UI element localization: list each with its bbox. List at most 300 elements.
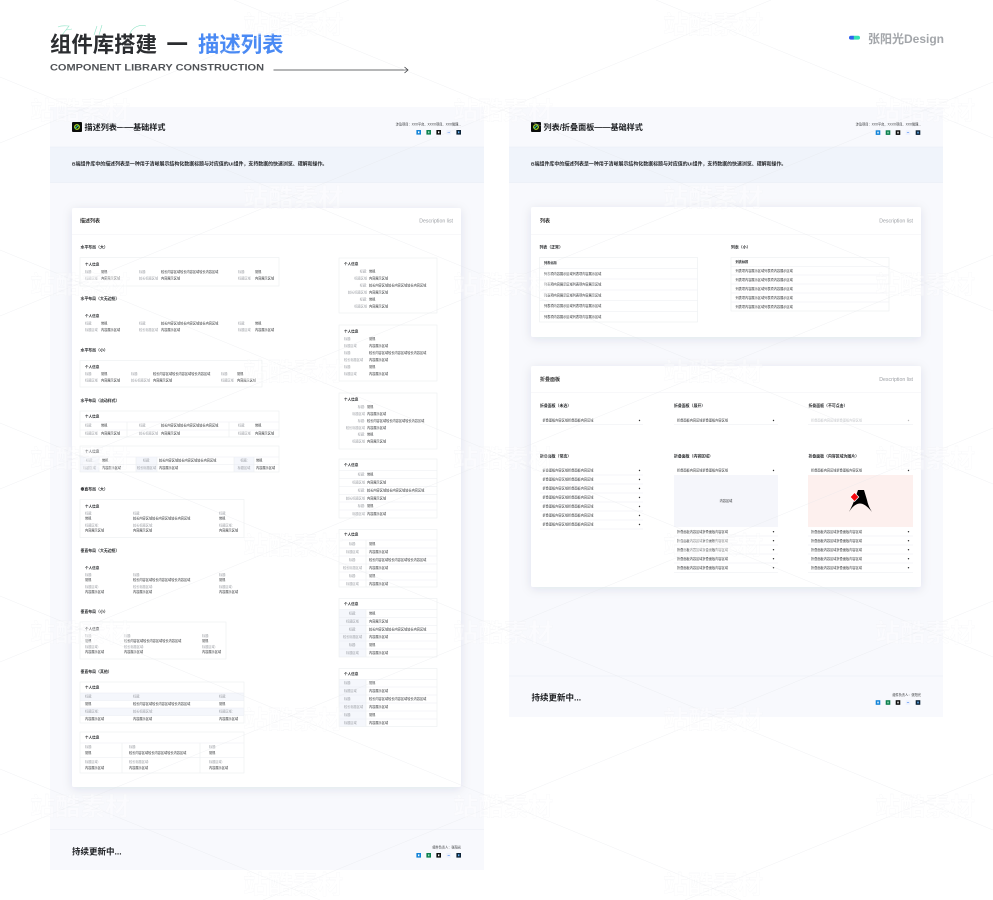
vertical other: banded: 常规 [85,701,92,706]
horizontal flow style: 标题: [85,423,92,428]
horizontal large borderless: 内容展示区域 [161,327,181,332]
watermark text: 站酷素材 [30,793,130,821]
vertical other: banded: 垂直布局（其他） [80,669,112,674]
horizontal filled table: 较长内容区域较长内容区域较长内容区域 [159,458,217,463]
single column: right aligned: 标题区域 [354,276,368,281]
single column: compact: 较长内容区域较长内容区域较长内容区域 [367,418,425,423]
list normal: 列表项内容展示区域列表项内容展示区域 [544,303,602,308]
horizontal large: 内容展示区域 [101,276,121,281]
vertical large borderless: 常规 [219,577,226,582]
horizontal large borderless: 内容展示区域 [255,327,275,332]
single column: left aligned: 常规 [369,364,376,369]
vertical large borderless: 内容展示区域 [85,589,105,594]
single column: right aligned: 个人信息 [344,261,359,266]
collapse open [674,403,778,424]
vertical large: 垂直布局（大） [80,487,108,492]
vertical other: grid: 较长标题区域: [129,759,149,764]
watermark text: 站酷素材 [663,706,763,734]
single column: filled table: 标题区域 [346,619,360,624]
collapse open: 折叠面板内容区域折叠面板内容区域 [677,418,729,423]
single column: ruled rows: 标题: [358,488,365,493]
watermark text: 站酷素材 [875,793,975,821]
single column: compact: 个人信息 [344,397,359,402]
single column: filled table: 内容展示区域 [369,619,389,624]
single column: table: 标题区域 [346,581,360,586]
footer: continuously updating [72,845,462,858]
watermark text: 站酷素材 [453,619,553,647]
single column: compact: 内容展示区域 [367,411,387,416]
horizontal flow style: 较长标题区域 [139,431,159,436]
single column: compact [339,393,437,449]
list small [731,245,889,311]
vertical other: banded: 标题: [85,694,92,699]
watermark text: 站酷素材 [453,793,553,821]
watermark text: 站酷素材 [30,271,130,299]
single column: filled table: 个人信息 [344,601,359,606]
vertical other: banded: 标题: [133,694,140,699]
single column: filled table: 标题: [349,611,356,616]
title: 一 [166,33,188,57]
vertical small: 标题: [124,633,131,638]
single column: ruled rows: 标题区域 [352,511,366,516]
vertical small: 标题区域: [202,644,216,649]
vertical small: 垂直布局（小） [80,609,108,614]
vertical large borderless: 垂直布局（大无边框） [80,548,119,553]
vertical large borderless: 标题区域: [219,584,233,589]
horizontal flow style: 标题区域 [238,431,252,436]
horizontal small [80,348,262,387]
collapse list default: 折叠面板（常态） [540,454,571,459]
single column: right aligned [339,258,437,313]
collapse with content area: 折叠面板（内容区域） [674,454,713,459]
single column: filled table: 标题: [349,627,356,632]
collapse with content area: 折叠面板内容区域折叠面板内容区域 [677,468,729,473]
collapse open: 折叠面板（展开） [674,403,705,408]
subtitle with arrow: COMPONENT LIBRARY CONSTRUCTION [50,62,264,73]
single column: filled table left aligned: 内容展示区域 [369,704,389,709]
horizontal large borderless: 标题: [139,321,146,326]
collapse with image: 折叠面板内容区域折叠面板内容区域 [811,565,863,570]
single column: right aligned: 内容展示区域 [369,276,389,281]
title: 描述列表 [198,33,284,57]
vertical small: 常规 [85,638,92,643]
horizontal small: 标题: [131,371,138,376]
watermark text: 站酷素材 [243,532,343,560]
horizontal small: 标题: [221,371,228,376]
horizontal small: 常规 [101,371,108,376]
single column: filled table: 内容展示区域 [369,634,389,639]
horizontal large: 常规 [101,269,108,274]
collapse closed: 折叠面板内容区域折叠面板内容区域 [542,418,594,423]
single column: ruled rows: 标题: [358,503,365,508]
vertical other: banded: 较长内容区域较长内容区域较长内容区域 [133,701,191,706]
heading: 列表/折叠面板——基础样式 [544,122,643,132]
vertical other: banded: 常规 [219,701,226,706]
horizontal filled table: 标题: [86,458,93,463]
horizontal flow style: 较长内容区域较长内容区域较长内容区域 [161,423,219,428]
collapse with image: 折叠面板（内容区域为图片） [808,454,859,459]
single column: left aligned: 内容展示区域 [369,357,389,362]
watermark text: 站酷素材 [663,871,763,899]
card: description list [72,208,461,787]
list normal: 列表项内容展示区域列表项内容展示区域 [544,314,602,319]
single column: table: 较长标题区域 [343,565,363,570]
horizontal large borderless: 内容展示区域 [101,327,121,332]
vertical large borderless: 标题: [219,572,226,577]
card: description list: 描述列表 [80,217,100,224]
horizontal filled table: 常规 [102,458,109,463]
horizontal filled table: 常规 [256,458,263,463]
horizontal flow style: 标题: [238,423,245,428]
horizontal large: 标题区域 [238,276,252,281]
vertical large: 较长内容区域较长内容区域较长内容区域 [133,516,191,521]
horizontal filled table: 内容展示区域 [159,465,179,470]
list normal: 列表项内容展示区域列表项内容展示区域 [544,282,602,287]
single column: filled table: 标题: [349,642,356,647]
list small: 列表项内容展示区域列表项内容展示区域 [736,268,794,273]
horizontal large borderless: 个人信息 [85,313,100,318]
watermark text: 站酷素材 [875,445,975,473]
vertical large: 标题: [219,511,226,516]
horizontal flow style: 常规 [101,423,108,428]
vertical other: banded: 内容展示区域 [85,716,105,721]
watermark text: 站酷素材 [30,445,130,473]
horizontal small: 水平布局（小） [80,348,108,353]
single column: table: 常规 [369,541,376,546]
single column: filled table: 常规 [369,611,376,616]
single column: right aligned: 标题区域 [354,304,368,309]
horizontal filled table: 标题: [143,458,150,463]
single column: ruled rows: 个人信息 [344,462,359,467]
related projects [856,122,921,135]
collapse list default: 折叠面板内容区域折叠面板内容区域 [542,486,594,491]
single column: filled table: 较长内容区域较长内容区域较长内容区域 [369,627,427,632]
vertical other: grid: 较长内容区域较长内容区域较长内容区域 [129,750,187,755]
vertical large: 标题: [85,511,92,516]
single column: table: 内容展示区域 [369,549,389,554]
vertical small: 较长标题区域: [124,644,144,649]
vertical other: grid: 标题区域: [85,759,99,764]
single column: right aligned: 标题: [360,283,367,288]
single column: ruled rows: 标题: [358,472,365,477]
brand logo: 张阳光Design [868,31,944,46]
horizontal large borderless: 较长内容区域较长内容区域较长内容区域 [161,321,219,326]
vertical small: 较长内容区域较长内容区域较长内容区域 [124,638,182,643]
vertical large borderless: 较长标题区域: [133,584,153,589]
watermark text: 站酷素材 [243,706,343,734]
card: list [531,207,921,337]
vertical large borderless: 标题: [133,572,140,577]
vertical other: grid: 标题: [129,744,136,749]
single column: right aligned: 较长标题区域 [348,290,368,295]
horizontal filled table [80,446,279,472]
single column: compact: 较长标题区域 [346,425,366,430]
vertical small: 内容展示区域 [85,649,105,654]
vertical other: banded: 标题区域: [219,709,233,714]
single column: filled table: 内容展示区域 [369,650,389,655]
single column: ruled rows: 内容展示区域 [367,496,387,501]
list normal: 列表项内容展示区域列表项内容展示区域 [544,271,602,276]
single column: ruled rows [339,459,437,518]
vertical other: grid: 内容展示区域 [209,765,229,770]
horizontal large borderless: 标题: [238,321,245,326]
horizontal large borderless [80,296,275,332]
list small: 列表（小） [731,245,750,250]
horizontal small: 内容展示区域 [237,378,257,383]
horizontal small: 标题区域 [85,378,99,383]
vertical large: 内容展示区域 [133,528,153,533]
vertical large: 标题: [133,511,140,516]
watermark text: 站酷素材 [663,184,763,212]
vertical large borderless: 内容展示区域 [133,589,153,594]
horizontal small: 内容展示区域 [101,378,121,383]
related projects: 涉及项目：XXX平台、XXXX项目、XXX管理... [856,122,921,127]
horizontal small: 内容展示区域 [153,378,173,383]
single column: compact: 标题: [358,404,365,409]
intro text: B端组件库中的描述列表是一种用于清晰展示结构化数据标题与对应值的UI组件，支持数据的快速浏览、理解和操作。 [531,161,786,168]
vertical small: 内容展示区域 [202,649,222,654]
watermark text: 站酷素材 [30,97,130,125]
horizontal large borderless: 常规 [255,321,262,326]
watermark text: 站酷素材 [453,271,553,299]
horizontal filled table: 标题区域 [83,465,97,470]
single column: left aligned: 常规 [369,336,376,341]
single column: table: 标题: [349,557,356,562]
watermark text: 站酷素材 [30,619,130,647]
single column: filled table [339,598,437,657]
vertical other: banded: 标题区域: [85,709,99,714]
vertical large: 较长标题区域: [133,523,153,528]
single column: left aligned: 标题: [344,364,351,369]
horizontal small: 标题: [85,371,92,376]
collapse list default: 折叠面板内容区域折叠面板内容区域 [542,522,594,527]
collapse with content area: 折叠面板内容区域折叠面板内容区域 [677,556,729,561]
list normal: 列表项内容展示区域列表项内容展示区域 [544,292,602,297]
icon: section logo [531,122,541,132]
subtitle with arrow [50,62,408,73]
list small: 列表项内容展示区域列表项内容展示区域 [736,286,794,291]
watermark text: 站酷素材 [243,358,343,386]
vertical small: 常规 [202,638,209,643]
panel: list and collapse [509,107,943,717]
single column: filled table: 常规 [369,642,376,647]
single column: right aligned: 内容展示区域 [369,304,389,309]
vertical other: grid: 标题: [85,744,92,749]
horizontal flow style: 标题: [139,423,146,428]
card: description list: Description list [419,218,454,224]
horizontal large: 较长标题区域 [139,276,159,281]
collapse with content area: 折叠面板内容区域折叠面板内容区域 [677,529,729,534]
vertical other: grid: 内容展示区域 [85,765,105,770]
horizontal large: 较长内容区域较长内容区域较长内容区域 [161,269,219,274]
vertical other: grid: 常规 [85,750,92,755]
collapse with image: 折叠面板内容区域折叠面板内容区域 [811,468,863,473]
single column: filled table left aligned: 常规 [369,712,376,717]
footer: continuously updating: 组件负责人：张阳光 [432,845,462,850]
vertical large: 标题区域: [219,523,233,528]
vertical other: banded: 内容展示区域 [133,716,153,721]
single column: filled table left aligned: 标题区域 [344,720,358,725]
horizontal flow style [80,398,279,437]
single column: right aligned: 标题: [360,269,367,274]
horizontal flow style: 常规 [255,423,262,428]
title [50,33,284,57]
horizontal large: 标题: [85,269,92,274]
intro text: B端组件库中的描述列表是一种用于清晰展示结构化数据标题与对应值的UI组件，支持数据的快速浏览、理解和操作。 [72,161,327,168]
watermark text: 站酷素材 [875,271,975,299]
single column: filled table left aligned [339,668,437,726]
vertical small: 个人信息 [85,626,100,631]
list small: 列表项内容展示区域列表项内容展示区域 [736,304,794,309]
horizontal filled table: 较长标题区域 [137,465,157,470]
related projects: 涉及项目：XXX平台、XXXX项目、XXX管理... [396,122,461,127]
vertical small: 标题: [202,633,209,638]
decoration: green script behind title [58,25,146,35]
single column: ruled rows: 较长内容区域较长内容区域较长内容区域 [367,488,425,493]
watermark text: 站酷素材 [453,445,553,473]
horizontal small: 较长内容区域较长内容区域较长内容区域 [153,371,211,376]
vertical large borderless: 内容展示区域 [219,589,239,594]
collapse with content area: 折叠面板内容区域折叠面板内容区域 [677,538,729,543]
horizontal flow style: 内容展示区域 [255,431,275,436]
collapse list default [540,454,643,529]
single column: filled table left aligned: 标题: [344,696,351,701]
watermark text: 站酷素材 [453,97,553,125]
horizontal flow style: 水平布局（流动样式） [80,398,119,403]
single column: compact: 常规 [367,404,374,409]
collapse closed: 折叠面板（未选） [540,403,571,408]
horizontal large: 标题: [139,269,146,274]
horizontal large: 内容展示区域 [161,276,181,281]
vertical other: banded: 标题: [219,694,226,699]
single column: ruled rows: 内容展示区域 [367,511,387,516]
single column: left aligned: 标题区域 [344,343,358,348]
vertical other: grid [80,732,244,773]
horizontal large: 内容展示区域 [255,276,275,281]
vertical other: banded: 较长标题区域: [133,709,153,714]
heading: 描述列表——基础样式 [84,122,165,132]
single column: table: 较长内容区域较长内容区域较长内容区域 [369,557,427,562]
vertical large: 常规 [219,516,226,521]
horizontal filled table: 标题: [240,458,248,463]
list normal: 列表标题 [544,260,558,265]
single column: compact: 内容展示区域 [367,425,387,430]
icon: section logo [72,122,82,132]
collapse disabled [808,403,913,424]
single column: ruled rows: 常规 [367,503,374,508]
icon: black A logo with red diamond [849,490,872,512]
watermark text: 站酷素材 [663,532,763,560]
single column: filled table left aligned: 常规 [369,680,376,685]
collapse with image: 折叠面板内容区域折叠面板内容区域 [811,538,863,543]
horizontal large: 个人信息 [85,262,100,267]
single column: table: 标题: [349,573,356,578]
horizontal large borderless: 标题区域 [238,327,252,332]
single column: compact: 内容展示区域 [367,439,387,444]
list small: 列表标题 [736,259,749,264]
single column: left aligned: 较长内容区域较长内容区域较长内容区域 [369,350,427,355]
collapse with content area: 内容区域 [720,498,733,503]
vertical other: grid: 常规 [209,750,216,755]
single column: compact: 标题: [358,418,365,423]
watermark text: 站酷素材 [243,184,343,212]
vertical large: 个人信息 [85,504,100,509]
single column: filled table left aligned: 标题: [344,680,351,685]
vertical large borderless [80,548,239,594]
vertical large borderless: 常规 [85,577,92,582]
single column: left aligned: 标题: [344,350,351,355]
collapse with image [808,454,913,572]
single column: right aligned: 标题: [360,297,367,302]
vertical other: grid: 标题区域: [209,759,223,764]
single column: table: 标题: [349,541,356,546]
single column: table: 常规 [369,573,376,578]
vertical other: grid: 内容展示区域 [129,765,149,770]
card: list: Description list [879,218,914,224]
horizontal small: 标题区域 [221,378,235,383]
vertical large: 内容展示区域 [219,528,239,533]
footer: continuously updating: 持续更新中... [532,692,581,702]
vertical large borderless: 标题: [85,572,92,577]
horizontal large: 标题区域 [85,276,99,281]
vertical other: banded: 个人信息 [85,685,100,690]
watermark text: 站酷素材 [663,358,763,386]
vertical large: 常规 [85,516,92,521]
collapse disabled: 折叠面板内容区域折叠面板内容区域 [811,418,863,423]
vertical large borderless: 标题区域: [85,584,99,589]
footer: continuously updating [532,692,922,705]
horizontal flow style: 标题区域 [85,431,99,436]
single column: filled table left aligned: 内容展示区域 [369,720,389,725]
title: 组件库搭建 [50,33,157,57]
vertical large: 标题区域: [85,523,99,528]
single column: filled table left aligned: 标题区域 [344,688,358,693]
single column: right aligned: 常规 [369,297,376,302]
watermark text: 站酷素材 [243,871,343,899]
collapse list default: 折叠面板内容区域折叠面板内容区域 [542,477,594,482]
single column: compact: 标题区域 [352,411,366,416]
watermark text: 站酷素材 [875,97,975,125]
collapse with content area: 折叠面板内容区域折叠面板内容区域 [677,547,729,552]
watermark text: 站酷素材 [663,11,763,39]
vertical other: banded: 内容展示区域 [219,716,239,721]
single column: filled table left aligned: 标题: [344,712,351,717]
vertical other: grid: 个人信息 [85,735,100,740]
vertical small [80,609,226,659]
footer: continuously updating: 持续更新中... [72,846,122,856]
collapse list default: 折叠面板内容区域折叠面板内容区域 [542,468,594,473]
single column: left aligned: 内容展示区域 [369,371,389,376]
single column: ruled rows: 内容展示区域 [367,480,387,485]
horizontal flow style: 个人信息 [85,414,100,419]
collapse with image: 折叠面板内容区域折叠面板内容区域 [811,556,863,561]
horizontal large: 标题: [238,269,245,274]
vertical large: 内容展示区域 [85,528,105,533]
horizontal large: 常规 [255,269,262,274]
vertical other: grid: 标题: [209,744,216,749]
single column: left aligned: 标题: [344,336,351,341]
panel: description list [50,107,484,870]
related projects [396,122,461,135]
card: collapse: Description list [879,377,914,383]
horizontal small: 个人信息 [85,364,100,369]
single column: table: 内容展示区域 [369,581,389,586]
collapse with content area: 折叠面板内容区域折叠面板内容区域 [677,565,729,570]
horizontal large: 水平布局（大） [80,245,108,250]
single column: table: 个人信息 [344,532,359,537]
horizontal large borderless: 标题: [85,321,92,326]
single column: ruled rows: 常规 [367,472,374,477]
